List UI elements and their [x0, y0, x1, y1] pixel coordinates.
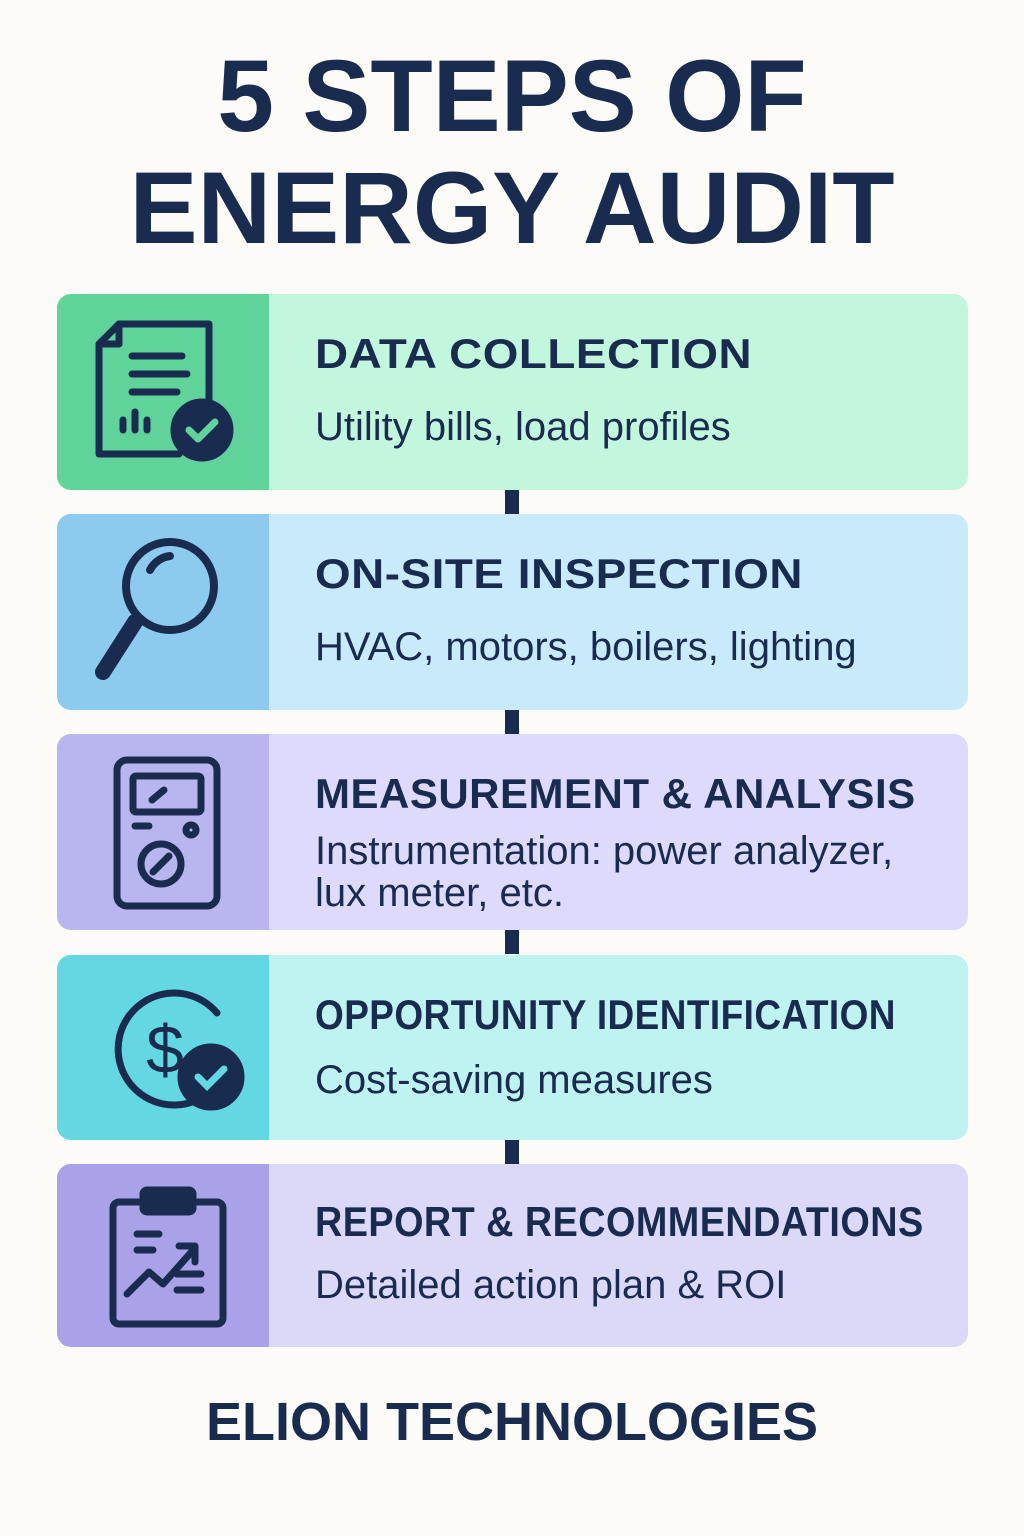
icon: clipboard chart — [57, 1164, 269, 1347]
footer brand: ELION TECHNOLOGIES — [206, 1392, 818, 1452]
card: data collection — [57, 294, 968, 490]
card: data collection: Utility bills, load profiles — [315, 405, 731, 449]
title — [129, 39, 895, 265]
card: measurement & analysis — [57, 734, 968, 930]
card: on-site inspection — [57, 514, 968, 710]
card: on-site inspection: ON-SITE INSPECTION — [315, 550, 803, 597]
card: measurement & analysis: lux meter, etc. — [315, 871, 564, 915]
card: report & recommendations — [57, 1164, 968, 1347]
icon: magnifier — [57, 514, 269, 710]
card: report & recommendations: Detailed action plan & ROI — [315, 1263, 786, 1307]
card: on-site inspection: HVAC, motors, boilers, lighting — [315, 625, 857, 669]
card: report & recommendations: REPORT & RECOMMENDATIONS — [315, 1198, 924, 1245]
card: measurement & analysis: MEASUREMENT & ANALYSIS — [315, 770, 916, 817]
card: opportunity identification: OPPORTUNITY IDENTIFICATION — [315, 991, 896, 1038]
icon: dollar with check: $ — [146, 1012, 184, 1088]
card: measurement & analysis: Instrumentation: power analyzer, — [315, 829, 893, 873]
card: data collection: DATA COLLECTION — [315, 330, 752, 377]
card: opportunity identification: Cost-saving measures — [315, 1058, 713, 1102]
icon: document with check — [57, 294, 269, 490]
icon: meter — [57, 734, 269, 930]
card: opportunity identification — [57, 955, 968, 1140]
title: ENERGY AUDIT — [129, 151, 895, 265]
title: 5 STEPS OF — [217, 39, 807, 153]
icon: dollar with check — [57, 955, 269, 1140]
